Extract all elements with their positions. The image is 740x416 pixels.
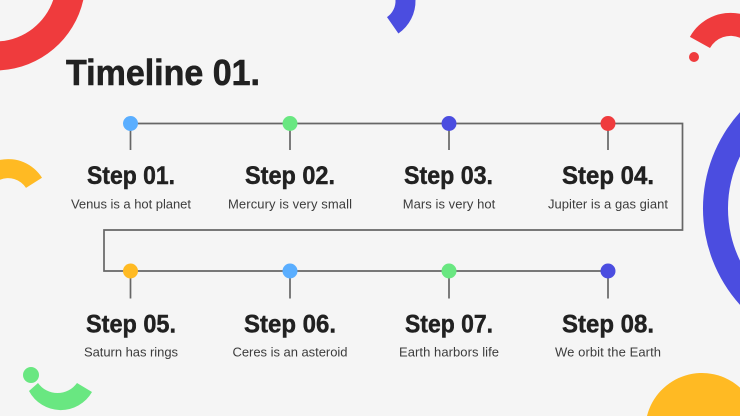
description: Saturn has rings: [84, 345, 178, 360]
title: Timeline 01.: [66, 52, 260, 93]
stem: [448, 123, 450, 150]
decoration: green arc bottom left: [29, 383, 92, 410]
decoration: red arc top right: [690, 13, 740, 48]
step 06: [232, 264, 348, 360]
decoration: yellow arc left: [0, 159, 42, 188]
decoration: red arc top left: [0, 0, 83, 70]
step 08: [555, 264, 661, 360]
stem: [130, 123, 132, 150]
heading: Step 02.: [245, 162, 335, 190]
step 01: [71, 116, 191, 212]
step 05: [84, 264, 178, 360]
step 02: [228, 116, 352, 212]
description: Jupiter is a gas giant: [548, 196, 668, 212]
description: Earth harbors life: [399, 345, 499, 360]
description: We orbit the Earth: [555, 345, 661, 360]
decoration: blue ring right: [703, 112, 740, 305]
heading: Step 01.: [87, 162, 175, 190]
decoration: green dot: [23, 367, 39, 383]
heading: Step 03.: [404, 162, 493, 190]
description: Mercury is very small: [228, 196, 352, 212]
marker: [282, 264, 298, 278]
timeline connector line: [104, 124, 682, 271]
marker: [442, 116, 456, 131]
description: Ceres is an asteroid: [232, 345, 348, 360]
marker: [123, 264, 138, 278]
step 04: [548, 116, 668, 212]
stem: [607, 123, 609, 150]
step 07: [399, 264, 499, 360]
heading: Step 08.: [562, 311, 654, 339]
step 03: [403, 116, 496, 212]
heading: Step 04.: [562, 162, 654, 190]
marker: [123, 116, 138, 131]
stem: [607, 271, 609, 298]
marker: [600, 116, 616, 131]
decoration: red dot: [689, 52, 699, 62]
stem: [289, 271, 291, 298]
decoration: yellow circle bottom right: [647, 373, 740, 416]
description: Venus is a hot planet: [71, 196, 191, 212]
stem: [448, 271, 450, 298]
heading: Step 06.: [244, 311, 336, 339]
marker: [442, 264, 456, 278]
stem: [130, 271, 132, 298]
decoration: blue arc top: [387, 0, 416, 34]
heading: Step 05.: [86, 311, 176, 339]
heading: Step 07.: [405, 311, 493, 339]
description: Mars is very hot: [403, 196, 496, 212]
marker: [282, 116, 298, 131]
marker: [600, 264, 616, 278]
stem: [289, 123, 291, 150]
